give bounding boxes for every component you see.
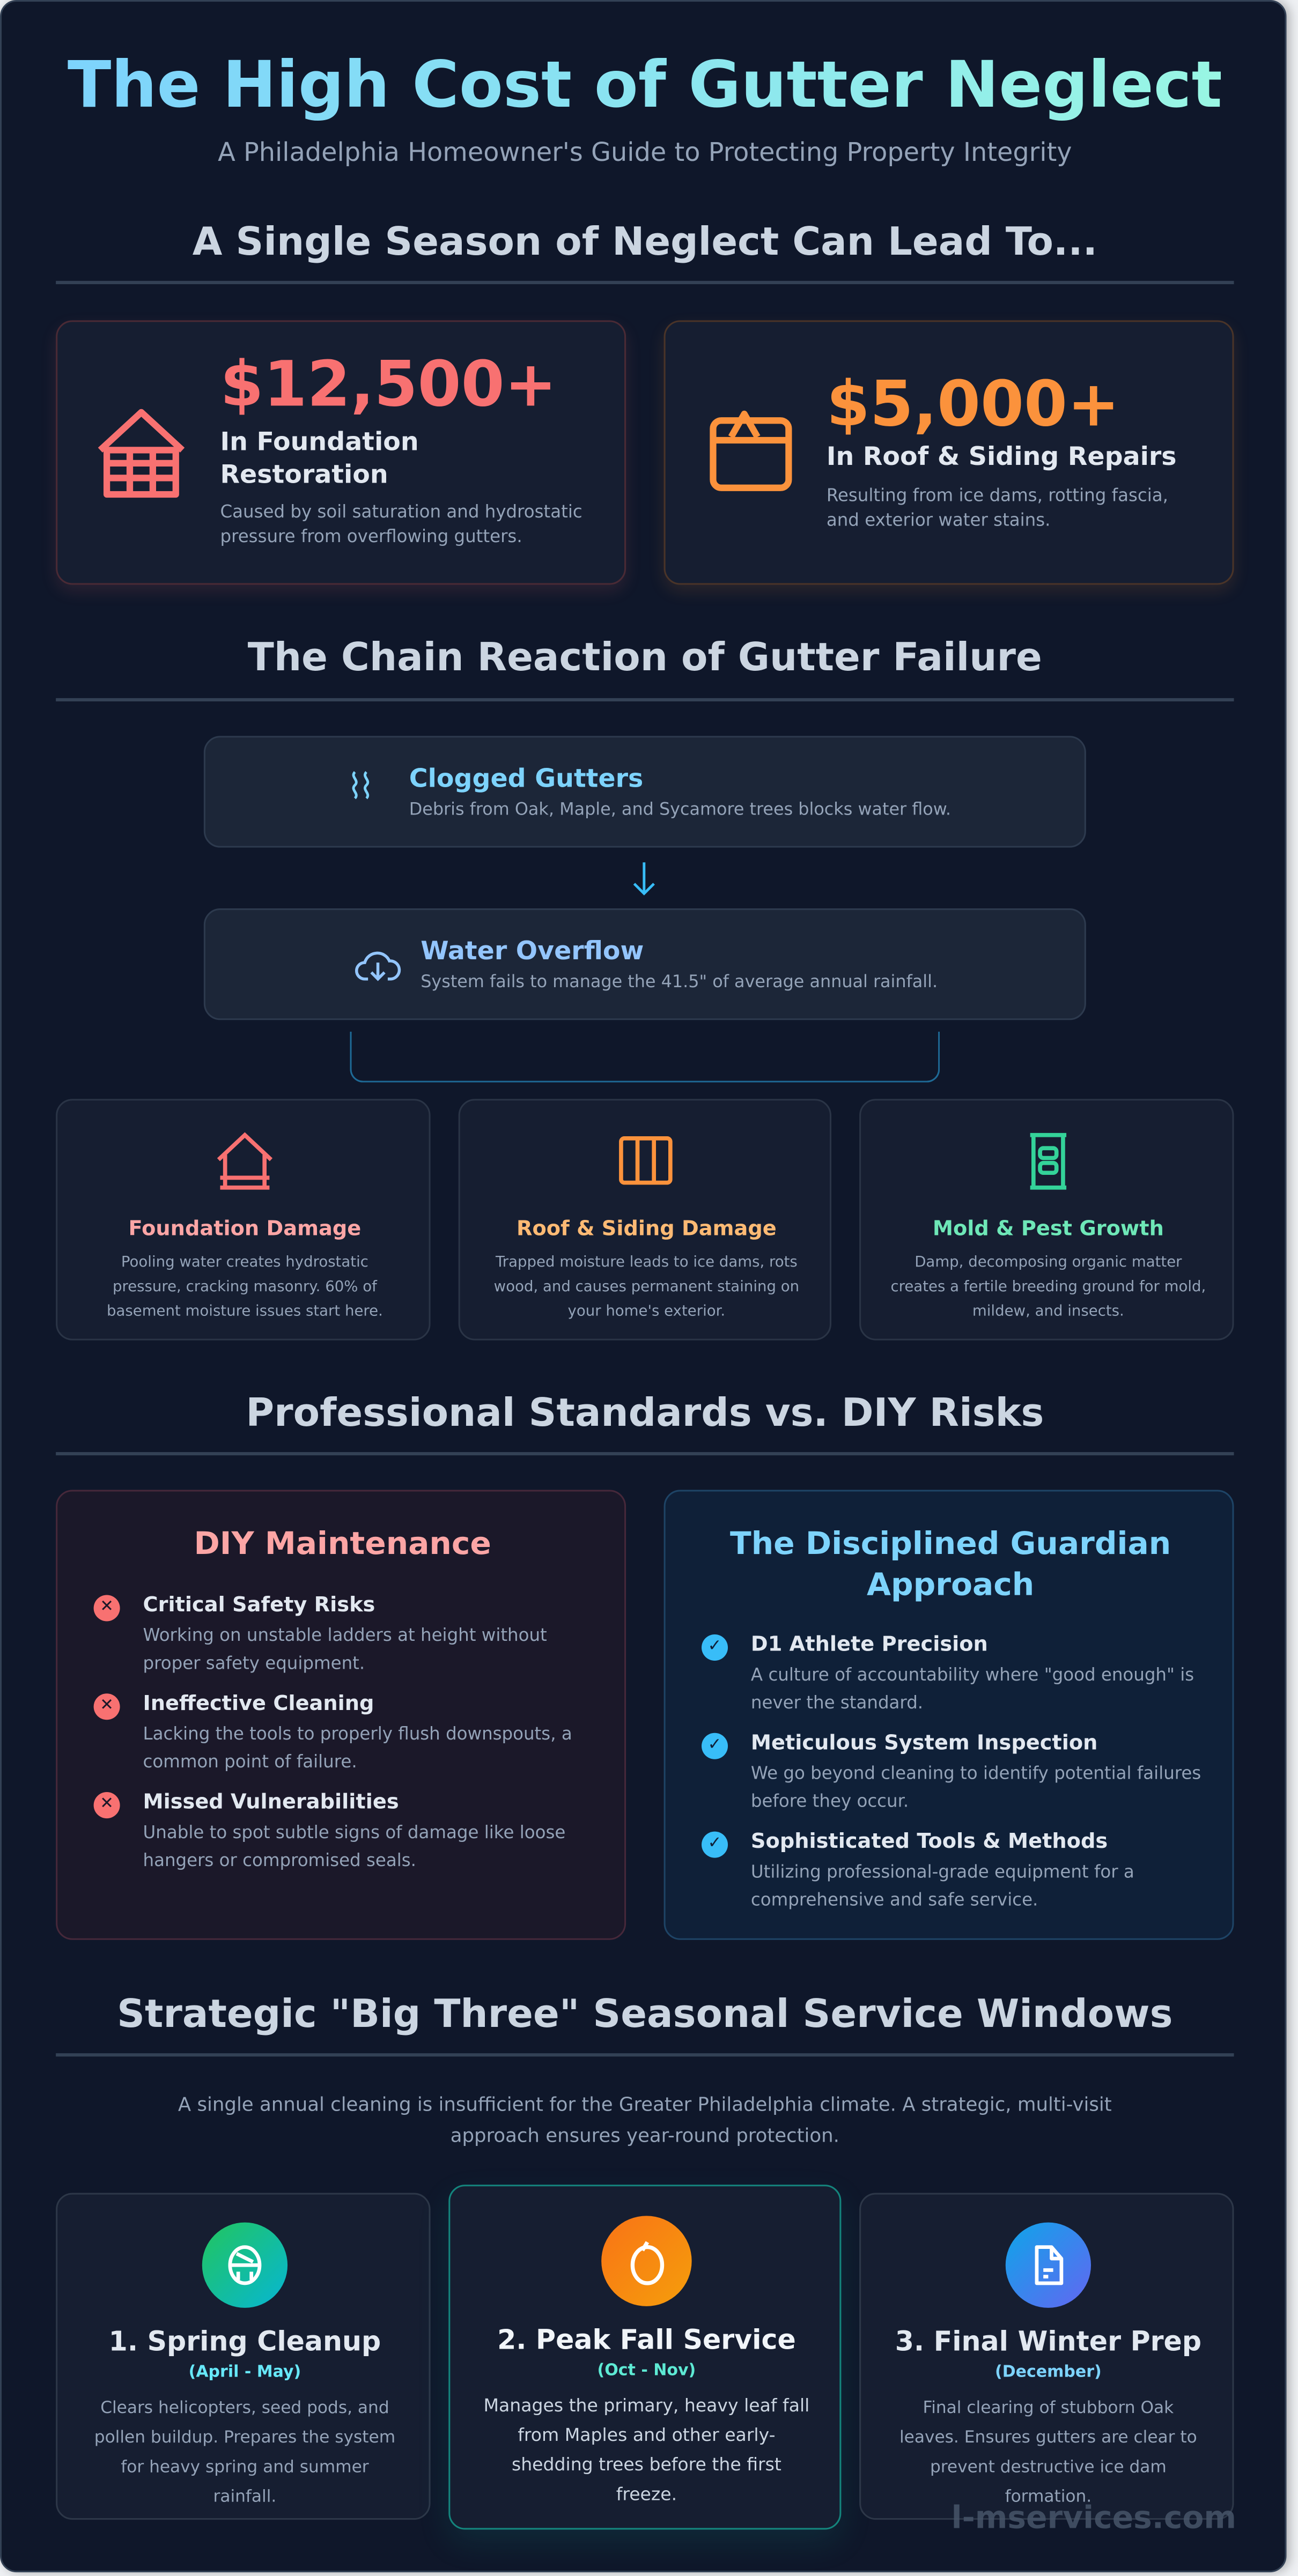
panel: guardian: D1 Athlete Precision: [751, 1631, 988, 1656]
title: The High Cost of Gutter Neglect: [68, 49, 1222, 123]
panel: DIY: ✕: [100, 1795, 114, 1813]
card: mold: creates a fertile breeding ground for mold, mildew, and insects.: [890, 1279, 1206, 1321]
card: mold: Damp, decomposing organic matter: [914, 1255, 1182, 1271]
panel: guardian: A culture of accountability where "good enough" is never the standard.: [751, 1665, 1194, 1713]
arrow: [633, 862, 655, 895]
panel: DIY: Working on unstable ladders at height without proper safety equipment.: [143, 1626, 547, 1674]
item: [93, 1592, 547, 1674]
item: [93, 1789, 565, 1871]
item: [93, 1690, 572, 1772]
panel: DIY: ✕: [100, 1697, 114, 1715]
panel: guardian: ✓: [708, 1736, 721, 1755]
step: clogged gutters: Debris from Oak, Maple, and Sycamore trees blocks water flow.: [409, 800, 951, 820]
icon: green circle: [202, 2223, 287, 2308]
icon: [619, 1136, 673, 1185]
card: spring: (April - May): [189, 2364, 301, 2382]
intro text: A single annual cleaning is insufficient for the Greater Philadelphia climate. A strategic, multi-visit approach ensures year-round protection.: [178, 2093, 1112, 2147]
card: foundation damage: Foundation Damage: [129, 1216, 361, 1240]
heading: big three: Strategic "Big Three" Seasonal Service Windows: [117, 1991, 1173, 2037]
card: winter: [859, 2193, 1234, 2520]
card: fall: [448, 2185, 841, 2529]
panel: DIY: Ineffective Cleaning: [143, 1690, 374, 1715]
watermark: l-mservices.com: [952, 2500, 1236, 2536]
label: In Foundation: [220, 427, 419, 457]
step: clogged gutters: Clogged Gutters: [409, 764, 643, 794]
card: mold: [859, 1099, 1234, 1341]
panel: guardian: The Disciplined Guardian: [730, 1526, 1171, 1562]
icon: orange circle: [601, 2216, 692, 2306]
step: water overflow: Water Overflow: [421, 936, 644, 966]
panel: foundation cost: [56, 320, 626, 585]
panel: guardian: Sophisticated Tools & Methods: [751, 1828, 1108, 1853]
panel: guardian: We go beyond cleaning to identify potential failures before they occur.: [751, 1764, 1201, 1812]
card: spring: Clears helicopters, seed pods, and pollen buildup. Prepares the system for heavy spring and summer rainfall.: [94, 2400, 395, 2507]
stat: $12,500+: [220, 348, 557, 420]
panel: DIY: Unable to spot subtle signs of damage like loose hangers or compromised seals.: [143, 1823, 565, 1871]
item: [702, 1631, 1194, 1713]
subtitle: A Philadelphia Homeowner's Guide to Protecting Property Integrity: [218, 138, 1072, 167]
label: In Roof & Siding Repairs: [827, 442, 1177, 471]
stat: $5,000+: [827, 368, 1120, 440]
card: winter: Final clearing of stubborn Oak leaves. Ensures gutters are clear to prevent destructive ice dam formation.: [899, 2400, 1197, 2507]
panel: guardian: Approach: [867, 1567, 1034, 1603]
panel: DIY: DIY Maintenance: [194, 1526, 491, 1562]
item: [702, 1828, 1134, 1911]
panel: guardian: ✓: [708, 1638, 721, 1656]
card: spring: [56, 2193, 431, 2520]
panel: roof cost: [664, 320, 1234, 585]
card: roof damage: Trapped moisture leads to ice dams, rots wood, and causes permanent staining on your home's exterior.: [494, 1255, 799, 1321]
desc: Resulting from ice dams, rotting fascia, and exterior water stains.: [827, 486, 1168, 530]
card: roof damage: [459, 1099, 831, 1341]
icon: blue circle: [1006, 2223, 1091, 2308]
icon: [217, 1132, 272, 1190]
icon: [1030, 1132, 1066, 1190]
step: water overflow: [204, 908, 1086, 1020]
card: spring: 1. Spring Cleanup: [109, 2326, 381, 2357]
panel: DIY: Lacking the tools to properly flush downspouts, a common point of failure.: [143, 1724, 572, 1772]
panel: DIY: ✕: [100, 1598, 114, 1616]
step: clogged gutters: [204, 736, 1086, 848]
panel: guardian: ✓: [708, 1835, 721, 1853]
card: fall: 2. Peak Fall Service: [497, 2325, 796, 2356]
label: [220, 427, 419, 490]
panel: guardian: Utilizing professional-grade equipment for a comprehensive and safe service.: [751, 1863, 1134, 1911]
card: fall: Manages the primary, heavy leaf fall from Maples and other early-shedding trees before the first freeze.: [483, 2395, 809, 2505]
card: fall: (Oct - Nov): [598, 2362, 696, 2380]
bracket connector: [350, 1032, 940, 1083]
panel: guardian: [664, 1490, 1234, 1940]
icon: box: [710, 411, 792, 491]
card: mold: Mold & Pest Growth: [933, 1216, 1164, 1240]
heading: professional vs DIY: Professional Standards vs. DIY Risks: [246, 1390, 1044, 1435]
card: winter: (December): [995, 2364, 1102, 2382]
card: foundation damage: Pooling water creates hydrostatic pressure, cracking masonry. 60% of basement moisture issues start here.: [107, 1255, 383, 1321]
item: [702, 1730, 1201, 1812]
icon: cloud: [355, 951, 401, 981]
panel: DIY: Critical Safety Risks: [143, 1592, 375, 1616]
card: winter: 3. Final Winter Prep: [895, 2326, 1201, 2357]
label: Restoration: [220, 460, 388, 490]
icon: house: [98, 409, 185, 498]
panel: DIY: [56, 1490, 626, 1940]
card: foundation damage: [56, 1099, 431, 1341]
heading: single season: A Single Season of Neglect Can Lead To...: [193, 218, 1097, 264]
panel: DIY: Missed Vulnerabilities: [143, 1789, 399, 1813]
card: roof damage: Roof & Siding Damage: [517, 1216, 777, 1240]
panel: guardian: Meticulous System Inspection: [751, 1730, 1097, 1755]
step: water overflow: System fails to manage the 41.5" of average annual rainfall.: [421, 972, 938, 992]
icon: waves: [352, 771, 369, 799]
desc: Caused by soil saturation and hydrostatic pressure from overflowing gutters.: [220, 502, 582, 547]
heading: chain reaction: The Chain Reaction of Gutter Failure: [248, 634, 1042, 680]
